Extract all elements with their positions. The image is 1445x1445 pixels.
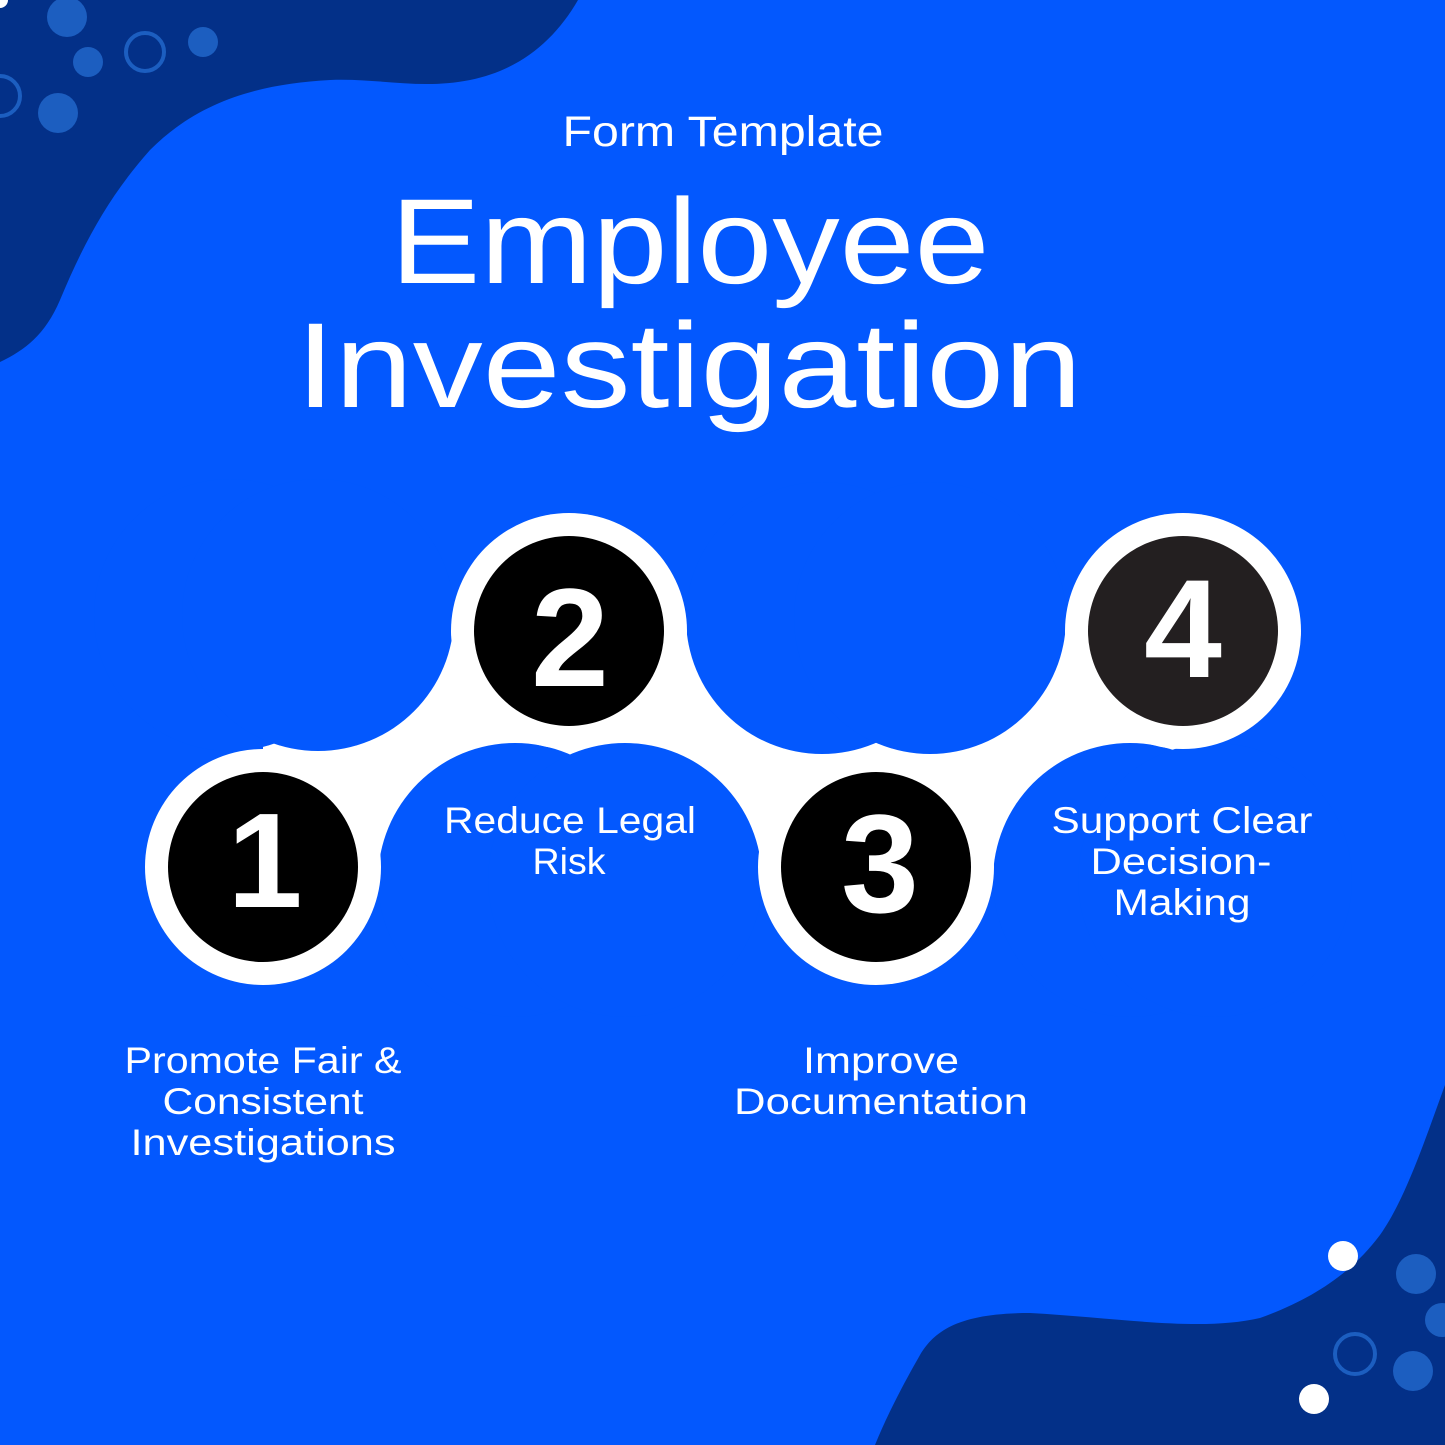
label 4: Decision- [1090, 841, 1272, 882]
decorative dots top-left [0, 0, 218, 133]
title: Investigation [296, 297, 1082, 433]
label 4 [1052, 800, 1312, 923]
step 2 badge: 2 [531, 559, 609, 716]
title: Employee [390, 173, 990, 309]
label 2 [444, 800, 696, 882]
step path (white wave) [94, 479, 1352, 1017]
label 3: Improve [803, 1040, 959, 1081]
label 4: Support Clear [1052, 800, 1312, 841]
subtitle: Form Template [562, 108, 884, 156]
step 3 badge [781, 772, 971, 962]
step 1 badge: 1 [227, 785, 303, 936]
label 2: Reduce Legal [444, 800, 696, 841]
step 2 badge [474, 536, 664, 726]
label 1 [124, 1040, 402, 1163]
step 4 badge [1088, 536, 1278, 726]
label 1: Consistent [162, 1081, 364, 1122]
label 2: Risk [532, 841, 606, 882]
label 3 [734, 1040, 1028, 1122]
decorative dots bottom-right [1299, 1241, 1445, 1414]
label 1: Investigations [130, 1122, 396, 1163]
title [296, 173, 1082, 433]
blob: bottom-right dark wave [875, 1085, 1445, 1445]
label 1: Promote Fair & [124, 1040, 402, 1081]
step 1 badge [168, 772, 358, 962]
label 3: Documentation [734, 1081, 1028, 1122]
step 4 badge: 4 [1144, 550, 1222, 707]
blob: top-left dark wave [0, 0, 578, 362]
step 3 badge: 3 [841, 785, 919, 942]
label 4: Making [1114, 882, 1250, 923]
